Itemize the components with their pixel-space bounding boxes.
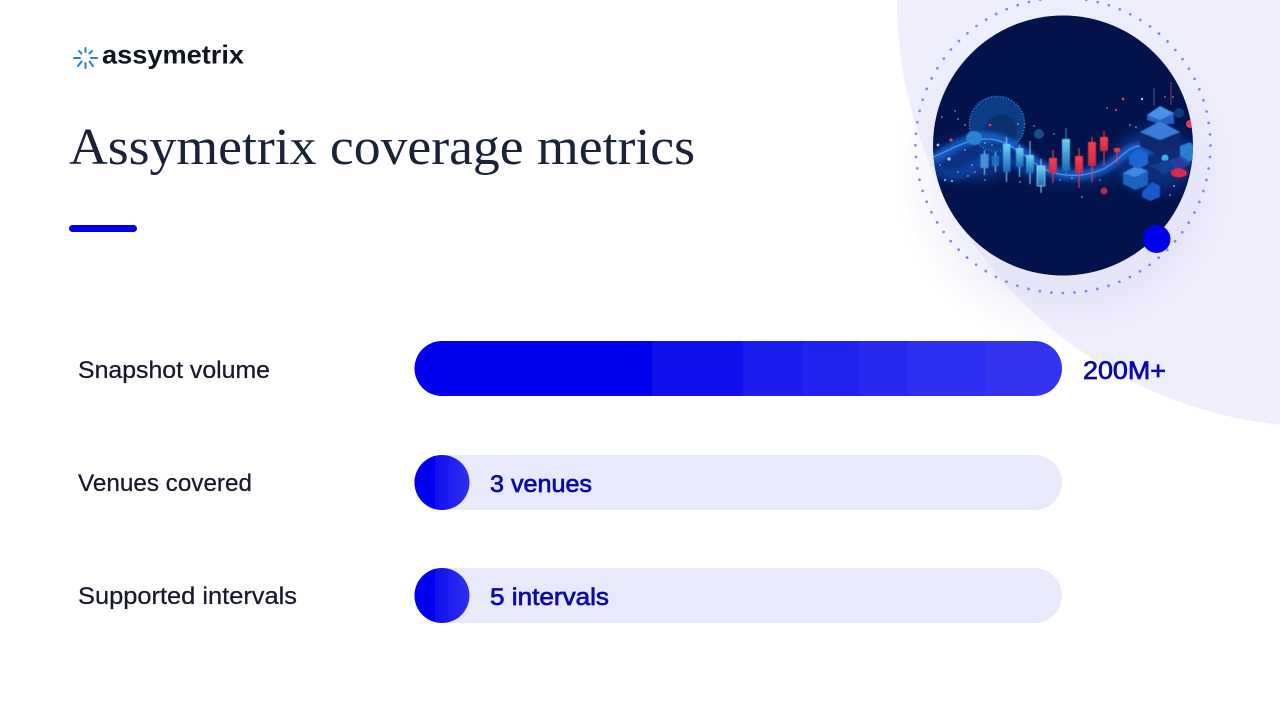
flat plate [1150,160,1180,174]
bar track: venues [414,455,1062,510]
cube top [1146,112,1175,125]
isometric cubes [1100,106,1194,201]
label: venues covered: Venues covered [78,470,252,497]
logo wordmark: assymetrix [102,40,245,70]
cube middle [1129,149,1148,169]
ambient blue haze [930,128,1197,192]
dome [969,96,1025,152]
title: Assymetrix coverage metrics [69,119,695,176]
row: venues covered [78,455,1062,510]
value: 5 intervals: 5 intervals [490,584,609,611]
particle wave [933,137,1150,175]
logo [74,40,245,70]
red glow [1171,168,1187,178]
row: snapshot volume [78,341,1166,396]
sparks [937,96,1175,198]
cube bottom [1142,182,1160,201]
value: 200M+: 200M+ [1083,357,1166,385]
value: 3 venues: 3 venues [490,471,592,498]
label: supported intervals: Supported intervals [78,583,297,610]
antenna lines [1154,82,1171,106]
accent bar [69,225,137,232]
bar fill: intervals [414,568,470,623]
label: snapshot volume: Snapshot volume [78,357,270,384]
cube right [1180,142,1194,163]
bar track: intervals [414,568,1062,623]
background quarter circle [895,0,1280,427]
bar: full volume bar [414,341,1063,396]
small spheres [966,108,1194,162]
dotted ring [916,0,1210,293]
cube large [1139,132,1180,156]
circular market image [930,15,1197,276]
blue marker dot [1142,225,1170,253]
row: supported intervals [78,568,1062,623]
cube lower left [1122,170,1148,190]
candlesticks [980,128,1120,193]
bar fill: venues [414,455,470,510]
icon: logo starburst [74,48,97,68]
